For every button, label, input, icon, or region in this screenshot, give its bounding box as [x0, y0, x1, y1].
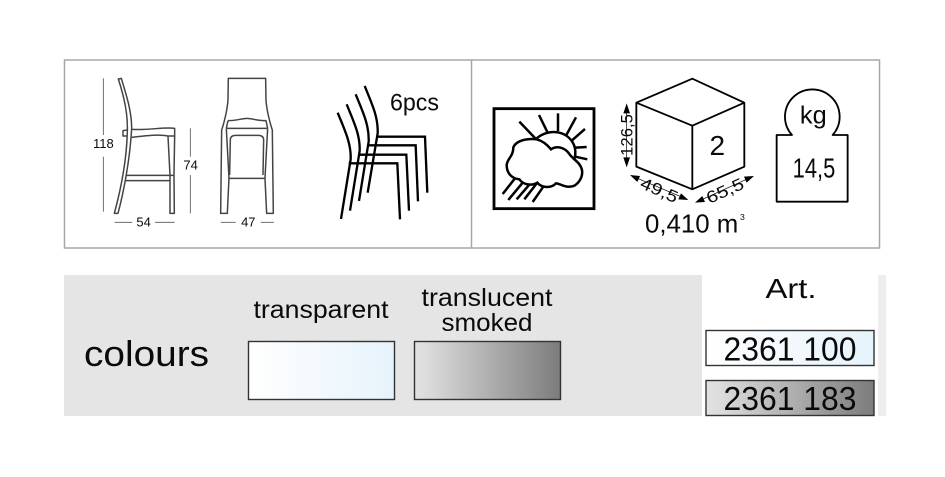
width arrow and value [695, 174, 754, 208]
volume: 3 [740, 212, 745, 222]
article code: 2361 183: 2361 183 [724, 380, 856, 417]
height arrow and value: 126,5 [618, 114, 637, 156]
icon: weather, sun cloud and rain [494, 109, 594, 209]
chair side view with dimensions [93, 78, 198, 229]
swatch: translucent smoked: translucent [422, 284, 553, 312]
height arrow and value [618, 103, 637, 167]
chair front view with dimensions: 47 [241, 214, 256, 229]
box quantity: 2 [710, 130, 725, 161]
label: 6pcs: 6pcs [390, 90, 439, 116]
icon: box with dimensions [618, 79, 754, 238]
swatch: translucent smoked [414, 284, 560, 400]
panel: colours band [64, 275, 702, 416]
icon: weight 14,5 kg: 14,5 [793, 152, 835, 183]
chair front view with dimensions [221, 78, 274, 229]
icon: weight 14,5 kg: kg [800, 101, 827, 129]
heading: colours: colours [84, 333, 209, 374]
article code: 2361 100: 2361 100 [724, 330, 856, 368]
swatch: transparent: transparent [254, 296, 389, 324]
chair side view with dimensions: 54 [136, 214, 151, 229]
depth arrow and value: 49,5 [637, 174, 681, 207]
article heading: Art. [766, 273, 816, 304]
right edge strip [878, 275, 886, 416]
swatch: translucent smoked: smoked [442, 309, 532, 337]
icon: six stacked chairs [338, 86, 427, 219]
icon: weight 14,5 kg [777, 89, 848, 202]
volume: 0,410 m [645, 208, 738, 238]
box outline [636, 79, 744, 189]
width arrow and value: 65,5 [703, 174, 747, 208]
panel: dimensions and packaging frame [64, 60, 880, 248]
depth arrow and value [630, 174, 688, 207]
chair side view with dimensions: 118 [93, 136, 114, 151]
chair side view with dimensions: 74 [183, 157, 198, 172]
swatch: transparent [248, 296, 394, 400]
